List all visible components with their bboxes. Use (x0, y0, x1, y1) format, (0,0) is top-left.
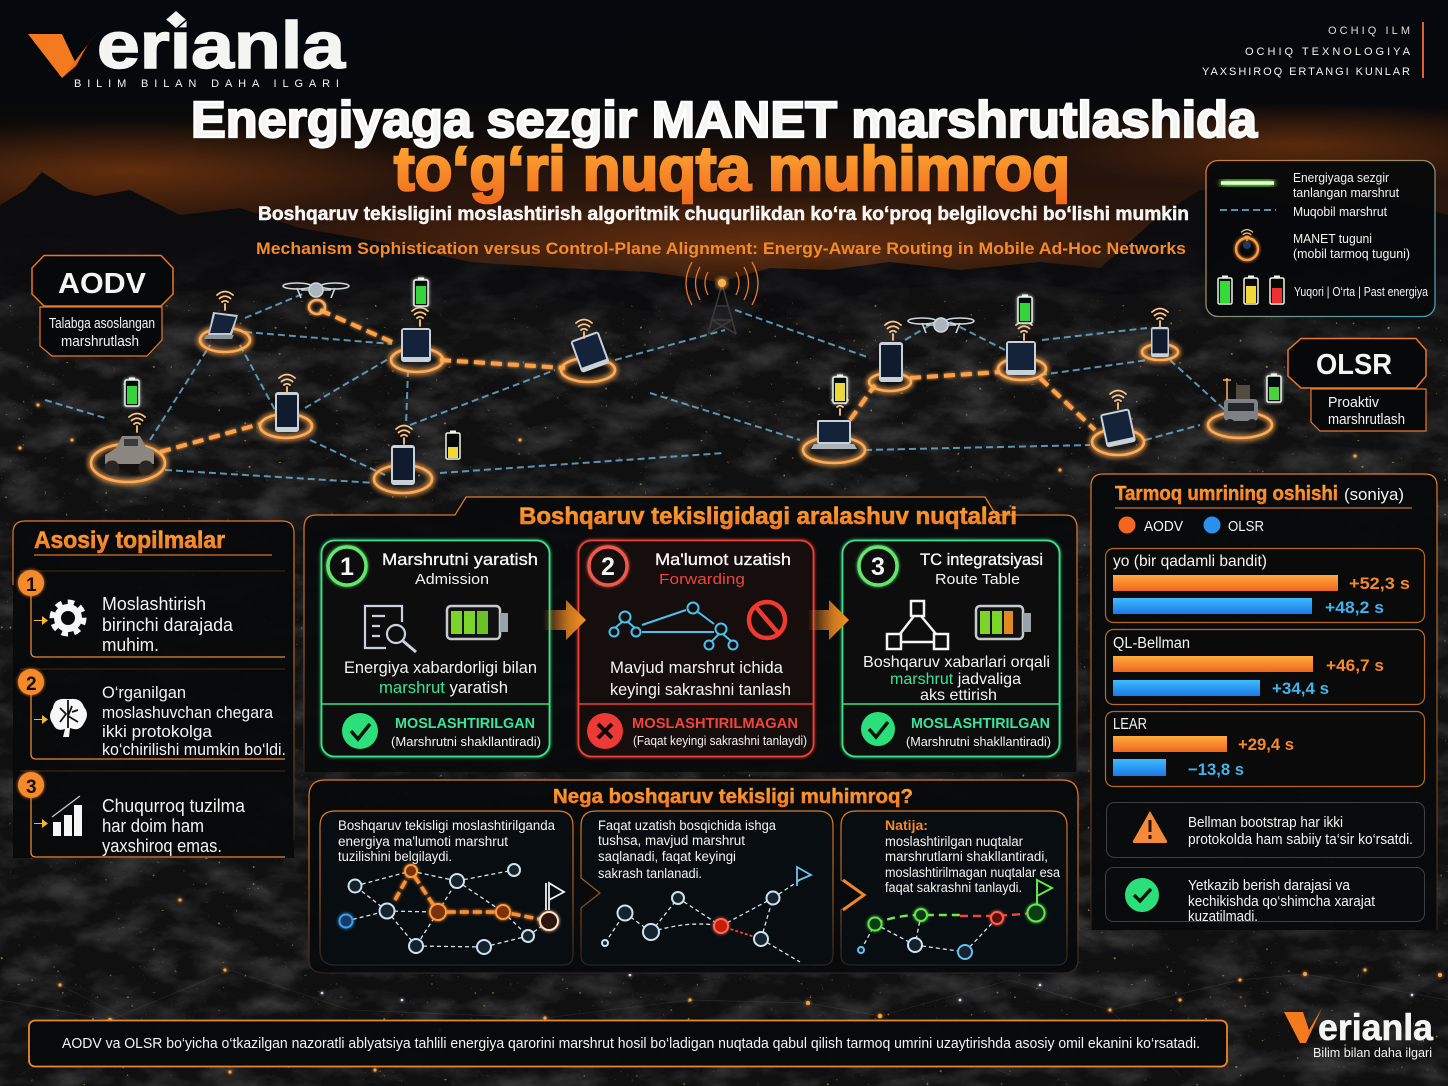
AODV label: AODV (58, 268, 147, 300)
finding 3: Chuqurroq tuzilma (102, 796, 246, 816)
legend: energy batteries (1218, 276, 1428, 304)
top-right slogan: OCHIQ ILM (1328, 25, 1410, 37)
legend: MANET node: MANET tuguni (1293, 232, 1372, 246)
node: tablet (391, 308, 443, 372)
top-right slogan (1202, 22, 1424, 78)
sub-panel: result: marshrutlarni shakllantiradi, (885, 849, 1048, 864)
chart legend (1118, 516, 1264, 535)
icon: routing triangle (887, 601, 948, 649)
node: phone right (869, 322, 911, 391)
finding 1: 1 (26, 575, 37, 596)
heading: network lifetime: (soniya) (1344, 485, 1404, 504)
top-right slogan: YAXSHIROQ ERTANGI KUNLAR (1202, 66, 1410, 78)
sub-panel: forwarding only (581, 811, 833, 965)
node: robot OLSR (1208, 378, 1272, 438)
sub-panel: result (841, 811, 1067, 965)
icon: battery high (447, 606, 508, 639)
card 3: TC integration: marshrut jadvaliga (890, 671, 1021, 688)
callout: Bellman bootstrap warning: Bellman bootstrap har ikki (1188, 815, 1343, 831)
node: phone (260, 374, 312, 438)
card 3: TC integration: (Marshrutni shakllantiradi) (906, 734, 1051, 749)
node: tablet lower right (1092, 390, 1144, 455)
card 3: TC integration: Boshqaruv xabarlari orqali (863, 654, 1050, 671)
sub-panel: aligned control plane: tuzilishini belgilaydi. (338, 849, 452, 864)
card 2: data forwarding: keyingi sakrashni tanlash (610, 680, 791, 699)
footer conclusion (29, 1020, 1227, 1066)
title (191, 91, 1258, 204)
subtitle: Boshqaruv tekisligini moslashtirish algoritmik chuqurlikdan ko‘ra ko‘proq belgilovchi bo‘lishi mumkin (258, 204, 1189, 225)
bar group: QL-Bellman (1106, 630, 1424, 704)
network: tower (686, 262, 758, 334)
finding 2: O‘rganilgan (102, 684, 186, 702)
finding 3: yaxshiroq emas. (102, 836, 222, 856)
card 2: data forwarding: Forwarding (659, 571, 745, 588)
bar group: QL-Bellman: QL-Bellman (1113, 635, 1190, 652)
node: vehicle AODV (91, 414, 165, 482)
card 1: route creation (322, 540, 550, 756)
bar group: QL-Bellman: +46,7 s (1326, 656, 1384, 675)
card 1: route creation: Marshrutni yaratish (382, 550, 538, 569)
node: laptop right (803, 396, 865, 463)
finding 3: 3 (26, 777, 37, 798)
node: phone far right (1142, 308, 1178, 360)
OLSR label: OLSR (1316, 349, 1392, 381)
AODV label: marshrutlash (61, 334, 139, 350)
title: to‘g‘ri nuqta muhimroq (394, 135, 1070, 204)
card 2: data forwarding: MOSLASHTIRILMAGAN (632, 715, 798, 732)
logo: Verianla: erianla (97, 8, 347, 82)
legend: selected route: Energiyaga sezgir (1293, 171, 1389, 185)
logo: Verianla (28, 8, 347, 90)
card 3: TC integration: TC integratsiyasi (920, 550, 1043, 569)
finding 1 (18, 570, 285, 657)
energy batteries on the map (125, 278, 1281, 459)
heading: key findings: Asosiy topilmalar (34, 527, 225, 554)
bar group: LEAR (1106, 712, 1424, 786)
legend: MANET node: (mobil tarmoq tuguni) (1293, 247, 1410, 261)
footer logo (1284, 1007, 1433, 1060)
sub-panel: result: Natija: (885, 818, 928, 833)
panel: key findings (13, 521, 294, 858)
card 2: data forwarding (578, 540, 814, 756)
panel: why the control plane matters (309, 780, 1078, 973)
OLSR label: Proaktiv (1328, 395, 1380, 411)
icon: route network (610, 602, 738, 650)
legend: alternative route: Muqobil marshrut (1293, 205, 1387, 219)
legend: selected route: tanlangan marshrut (1293, 186, 1400, 200)
sub-panel: aligned control plane: Boshqaruv tekisligi moslashtirilganda (338, 818, 555, 833)
node: drone left (283, 283, 349, 314)
sub-panel: result: moslashtirilmagan nuqtalar esa (885, 865, 1060, 880)
graph: shaped route (340, 864, 564, 954)
card 2: data forwarding: Mavjud marshrut ichida (610, 658, 784, 677)
bar group: one-step bandit: +52,3 s (1349, 574, 1410, 593)
node: phone lower (374, 426, 432, 493)
graph: next-hop choice (602, 867, 811, 962)
sub-panel: aligned control plane: energiya ma'lumoti marshrut (338, 834, 508, 849)
card 3: TC integration (842, 540, 1060, 756)
chart legend: OLSR (1228, 518, 1264, 535)
finding 2: moslashuvchan chegara (102, 704, 274, 722)
sub-panel: forwarding only: tushsa, mavjud marshrut (598, 833, 745, 848)
glowing ground dots (18, 403, 1442, 1074)
OLSR label (1288, 338, 1426, 431)
callout: Bellman bootstrap warning (1106, 802, 1424, 858)
card 1: route creation: (Marshrutni shakllantiradi) (391, 734, 541, 749)
footer conclusion: AODV va OLSR bo‘yicha o‘tkazilgan nazoratli ablyatsiya tahlili energiya qarorini marshrut hosil bo‘ladigan nuqtada qabul qilish tarmoq umrini uzaytirishda asosiy omil ekanini ko‘rsatadi. (62, 1035, 1200, 1052)
panel: network lifetime growth (1091, 474, 1437, 930)
card 2: data forwarding: Ma'lumot uzatish (655, 550, 791, 569)
footer logo: erianla (1318, 1007, 1433, 1048)
top-right slogan: OCHIQ TEXNOLOGIYA (1245, 46, 1411, 58)
legend (1206, 160, 1435, 316)
english subtitle: Mechanism Sophistication versus Control-Plane Alignment: Energy-Aware Routing in Mobile Ad-Hoc Networks (256, 239, 1186, 258)
panel: control-plane intervention points (304, 497, 1077, 772)
bar group: LEAR: LEAR (1113, 716, 1147, 733)
bar group: LEAR: +29,4 s (1238, 735, 1294, 754)
bar group: one-step bandit: +48,2 s (1325, 598, 1384, 617)
node: drone right (908, 318, 974, 333)
card 1: route creation: marshrut yaratish (379, 679, 508, 697)
sub-panel: aligned control plane (320, 811, 573, 965)
card 1: route creation: 1 (340, 553, 354, 581)
bar group: QL-Bellman: +34,4 s (1272, 679, 1329, 698)
chart legend: AODV (1144, 518, 1183, 535)
sub-panel: forwarding only: sakrash tanlanadi. (598, 866, 702, 881)
OLSR label: marshrutlash (1328, 412, 1405, 428)
icon: document search (365, 606, 416, 652)
AODV label (32, 256, 173, 356)
card 2: data forwarding: (Faqat keyingi sakrashni tanlaydi) (633, 733, 807, 748)
icon: battery medium (976, 606, 1031, 639)
node: laptop (200, 292, 250, 352)
icon: prohibited (749, 602, 785, 638)
card 1: route creation: Energiya xabardorligi bilan (344, 659, 537, 677)
graph: result route (858, 880, 1052, 959)
card 3: TC integration: aks ettirish (920, 687, 997, 704)
bar group: one-step bandit (1106, 548, 1424, 622)
finding 3: har doim ham (102, 816, 204, 836)
legend: selected route (1221, 171, 1400, 200)
sub-panel: result: faqat sakrashni tanlaydi. (885, 880, 1022, 895)
callout: no extra overhead (1106, 868, 1424, 925)
network: selected routes (orange dashes) (160, 310, 1095, 452)
sub-panel: forwarding only: saqlanadi, faqat keyingi (598, 849, 736, 864)
sub-panel: result: moslashtirilgan nuqtalar (885, 834, 1023, 849)
card 3: TC integration: Route Table (935, 571, 1020, 588)
title: Energiyaga sezgir MANET marshrutlashida (191, 91, 1258, 148)
arrow: card 1 to card 2 (543, 600, 586, 640)
finding 1: birinchi darajada (102, 615, 234, 635)
callout: Bellman bootstrap warning: protokolda ham sabiiy ta‘sir ko‘rsatdi. (1188, 832, 1413, 848)
card 1: route creation: Admission (415, 571, 489, 588)
heading: network lifetime: Tarmoq umrining oshishi (1115, 483, 1338, 505)
finding 2 (18, 669, 286, 759)
card 3: TC integration: 3 (871, 553, 885, 581)
heading: intervention points: Boshqaruv tekisligidagi aralashuv nuqtalari (519, 503, 1017, 530)
finding 2: ikki protokolga (102, 723, 213, 741)
callout: no extra overhead: Yetkazib berish darajasi va (1188, 878, 1351, 894)
sub-panel: forwarding only: Faqat uzatish bosqichida ishga (598, 818, 776, 833)
finding 2: ko‘chirilishi mumkin bo‘ldi. (102, 741, 286, 759)
card 2: data forwarding: 2 (601, 553, 615, 581)
callout: no extra overhead: kechikishda qo‘shimcha xarajat (1188, 894, 1375, 910)
callout: no extra overhead: kuzatilmadi. (1188, 909, 1258, 925)
bar group: one-step bandit: yo (bir qadamli bandit) (1113, 553, 1267, 570)
finding 2: 2 (26, 674, 37, 695)
AODV label: Talabga asoslangan (49, 316, 155, 332)
legend: MANET node (1236, 230, 1410, 261)
footer logo: Bilim bilan daha ilgari (1313, 1046, 1432, 1060)
logo: Verianla: BILIM BILAN DAHA ILGARI (74, 78, 339, 90)
finding 3 (18, 771, 285, 857)
finding 1: muhim. (102, 635, 159, 655)
finding 1: Moslashtirish (102, 594, 206, 614)
network: alternative routes (blue dashes) (45, 293, 1225, 483)
card 1: route creation: MOSLASHTIRILGAN (395, 715, 535, 732)
arrow: card 2 to card 3 (808, 600, 849, 640)
node: tablet right (998, 322, 1046, 380)
card 3: TC integration: MOSLASHTIRILGAN (911, 715, 1050, 732)
heading: why it matters: Nega boshqaruv tekisligi muhimroq? (553, 786, 913, 808)
bar group: LEAR: −13,8 s (1188, 760, 1244, 779)
node: tablet rotated (561, 320, 615, 382)
